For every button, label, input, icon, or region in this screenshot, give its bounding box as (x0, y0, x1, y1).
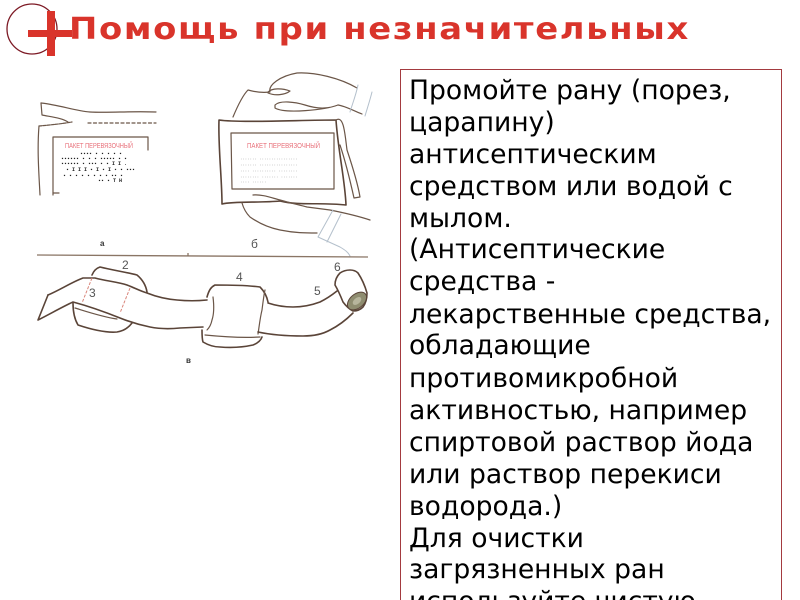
instruction text: Промойте рану (порез, (409, 75, 731, 106)
bandage tail (336, 119, 360, 198)
illustration: bandage with pads (c): 3 (89, 286, 96, 300)
central pad (207, 285, 268, 302)
instruction text: загрязненных ран (409, 554, 665, 585)
illustration: bandage with pads (c): 6 (334, 260, 341, 274)
packet body (219, 120, 346, 205)
packet print: ::::::: :::::::::::::::: (240, 158, 298, 162)
instruction text: Для очистки (409, 523, 584, 554)
caption b: б (251, 237, 258, 251)
packet fine print (61, 151, 135, 184)
packet print: :::: :::::: (240, 181, 266, 185)
illustration: bandage with pads (c): 4 (236, 270, 243, 284)
illustration: packet held in hands (b) (219, 73, 372, 256)
instruction text: антисептическим (409, 139, 657, 170)
packet fine print: ▪▪▪▪▪▪ ▪ ▪▪▪ ▪ ▪ I I . (61, 161, 127, 167)
packet fine print: ▪ ▪ ▪ ▪ ▪ ▪ ▪ ▪ ▪▪ ▪ (63, 173, 123, 179)
bandage roll (335, 270, 367, 311)
instruction text: обладающие (409, 330, 591, 361)
packet fine print: ▪▪▪▪▪▪ ▪ ▪ ▪ ▪▪▪▪▪ ▪ ▪ (61, 156, 127, 162)
illustration: bandage with pads (c): 5 (314, 284, 321, 298)
instruction text: водорода.) (409, 491, 562, 522)
title: Помощь при незначительных (69, 12, 690, 47)
packet print: :::::::: ::::::: ::::::: (240, 176, 298, 180)
instruction text: активностью, например (409, 395, 747, 426)
packet print: ::::::: :::::::::::::::: (240, 164, 298, 168)
packet fine print: ▪ I I I ▪ I ▪ I ▪ ▪ ▪▪▪ (66, 167, 135, 173)
lower hand (253, 195, 370, 220)
upper hand (233, 73, 357, 117)
packet print (240, 158, 298, 185)
instruction text: противомикробной (409, 363, 678, 394)
instruction text: лекарственные средства, (409, 299, 771, 330)
packet fine print: ▪▪▪▪ ▪ ▪ ▪ ▪ ▪ (80, 151, 122, 157)
instruction text: (Антисептические (409, 234, 665, 265)
numbers: 2 (122, 258, 129, 272)
packet fine print: ▪▪ ▪ T H (98, 178, 122, 184)
instruction text: средства - (409, 266, 555, 297)
panel: instructions (400, 70, 782, 600)
caption c: в (186, 356, 191, 365)
instruction text: средством или водой с (409, 171, 733, 202)
icon: red cross in a circle (7, 4, 72, 56)
illustration: opened dressing packet (a) (38, 103, 156, 195)
instruction text: или раствор перекиси (409, 459, 722, 490)
instruction text: спиртовой раствор йода (409, 427, 753, 458)
instruction text: мылом. (409, 203, 512, 234)
packet label: ПАКЕТ ПЕРЕВЯЗОЧНЫЙ (65, 141, 133, 150)
illustration: bandage with pads (c) (38, 258, 370, 347)
divider rule (37, 253, 368, 257)
packet print: :::: :::::::::: :::::::: (240, 170, 298, 174)
instruction text: царапину) (409, 107, 555, 138)
packet heading: ПАКЕТ ПЕРЕВЯЗОЧНЫЙ (247, 141, 320, 150)
caption a: а (100, 239, 105, 248)
